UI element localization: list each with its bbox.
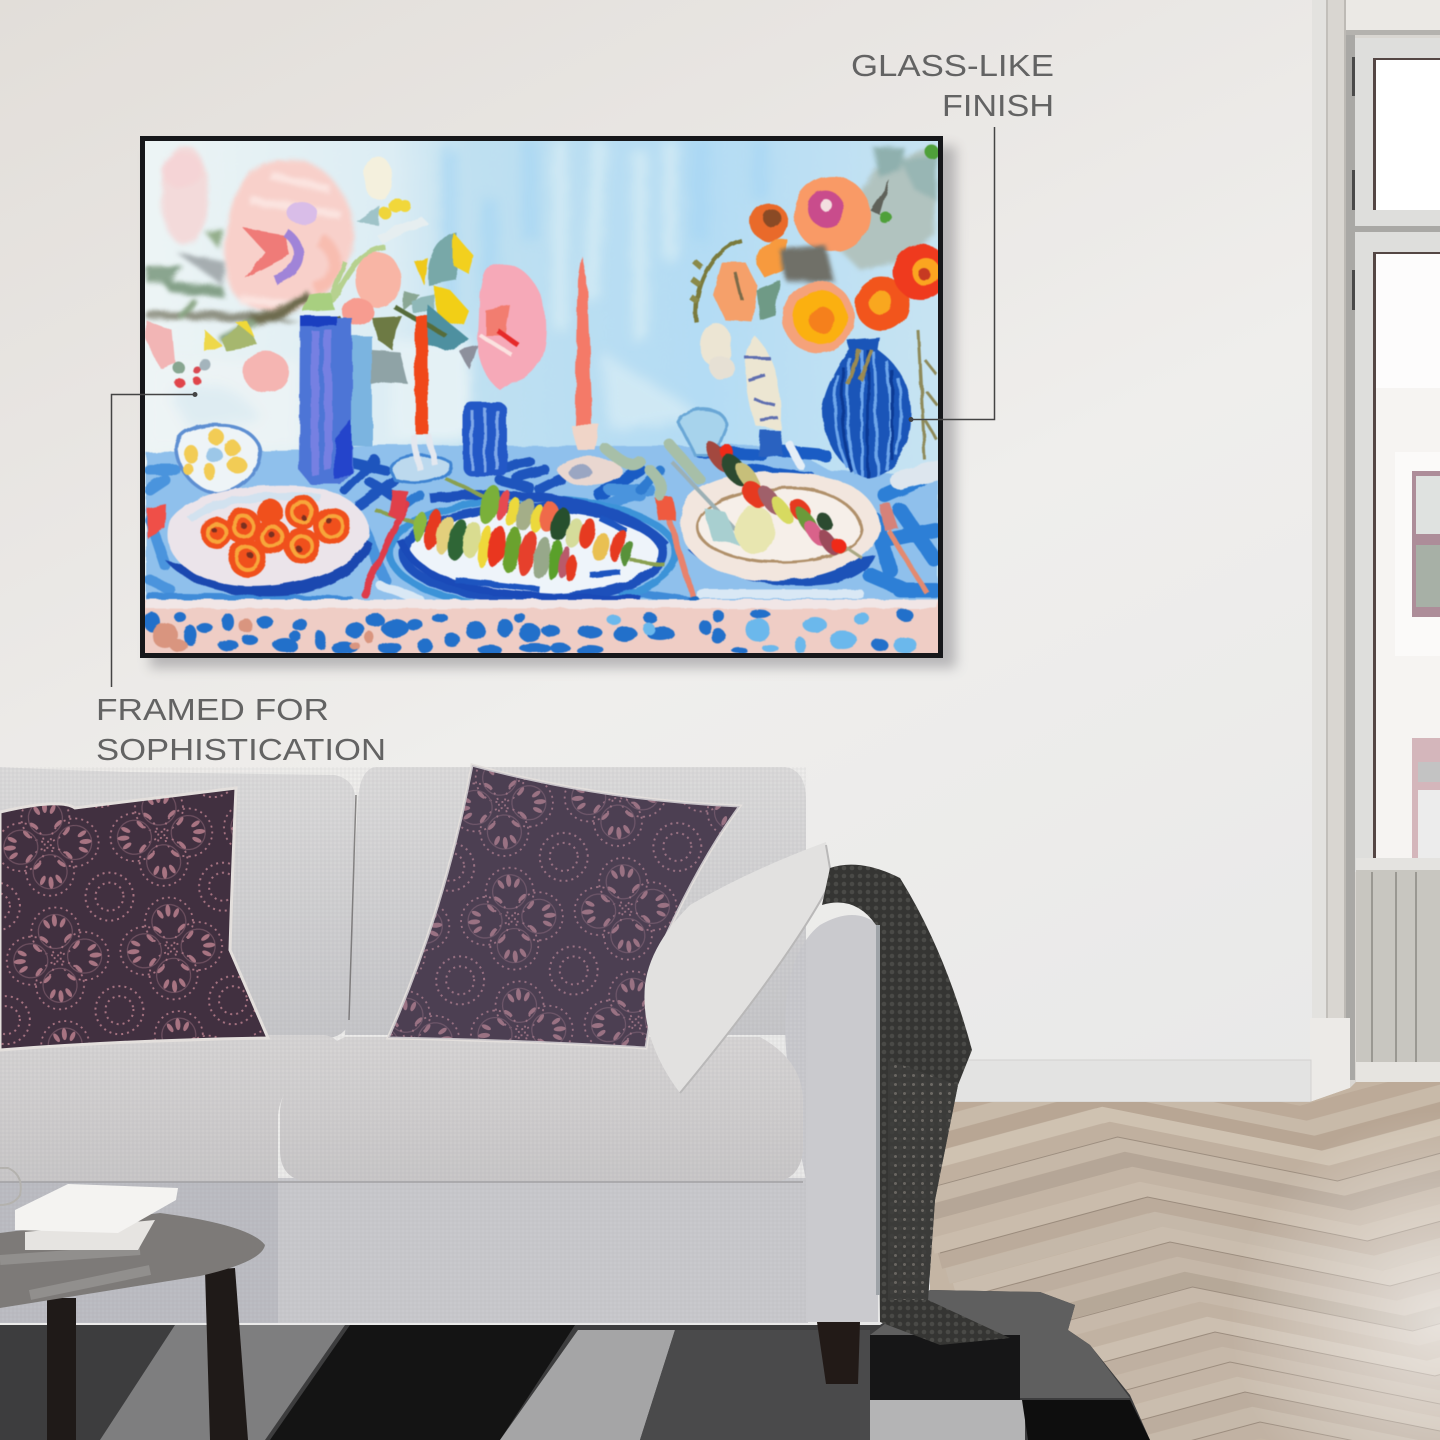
knit throw blanket — [822, 865, 1010, 1345]
left plate of tomatoes — [165, 486, 372, 597]
tablecloth base — [146, 445, 938, 610]
left red fork piece — [147, 504, 166, 538]
callout: glass-like finish: GLASS-LIKE — [851, 48, 1054, 83]
center platter — [390, 495, 676, 608]
painted sky background — [145, 141, 938, 601]
right plate — [673, 463, 880, 586]
marble highlights — [0, 1250, 150, 1295]
skewer on right plate — [701, 438, 862, 558]
blue glasses — [463, 402, 727, 476]
linen texture — [0, 767, 806, 1322]
right bouquet — [692, 145, 949, 456]
big pink poppy — [477, 264, 546, 390]
callout: glass-like finish: FINISH — [942, 88, 1054, 123]
bottom blue dabs — [144, 609, 913, 655]
white pillow — [644, 842, 832, 1093]
coral candle and holder — [557, 256, 623, 486]
top book — [15, 1184, 178, 1233]
forks right — [654, 497, 927, 609]
right back cushion — [345, 767, 806, 1035]
center fork — [364, 490, 409, 594]
center purple pillow — [388, 765, 740, 1048]
callout: glass-like finish — [851, 48, 1054, 422]
yellow-white upper flowers — [330, 156, 425, 302]
window and door frame — [1310, 0, 1440, 1102]
seat shadow — [0, 1181, 803, 1183]
teal leaves and yellow blossoms — [395, 232, 478, 370]
sofa arm — [785, 915, 878, 1322]
lower book — [25, 1220, 155, 1250]
painting frame with shadow — [140, 136, 956, 668]
cushion gap — [349, 795, 356, 1020]
ghost flower — [161, 145, 209, 245]
glass — [0, 1168, 21, 1205]
main seat cushion — [280, 1037, 803, 1182]
callout: framed for sophistication: SOPHISTICATION — [96, 732, 386, 767]
light blue dabs — [607, 613, 917, 653]
left back cushion — [0, 767, 355, 1038]
pink-brown dabs left — [152, 619, 375, 651]
callout: framed for sophistication: FRAMED FOR — [96, 692, 329, 727]
left seat cushion — [0, 1035, 338, 1182]
striped rug — [0, 1290, 1150, 1440]
callout: framed for sophistication — [96, 392, 386, 767]
blue vase — [299, 316, 372, 484]
sage leaves — [605, 445, 700, 495]
ribbed blue vase — [822, 330, 937, 478]
lower left pink blooms and berries — [146, 320, 289, 393]
left purple pillow — [0, 788, 268, 1050]
skewers on platter — [375, 478, 665, 582]
coffee table with books — [0, 1168, 265, 1440]
tablecloth strokes — [150, 445, 938, 600]
orange candle — [390, 316, 450, 483]
sofa — [0, 765, 1010, 1384]
sofa leg — [817, 1322, 860, 1384]
background brush strokes — [146, 140, 760, 450]
small bowl — [176, 425, 260, 494]
pink roses and leaves — [300, 252, 420, 385]
painting: table setting — [130, 130, 950, 660]
big pink flower — [225, 159, 353, 313]
bottom table edge — [145, 600, 938, 653]
left foliage — [146, 228, 310, 340]
sofa base — [0, 1178, 280, 1323]
table legs — [47, 1298, 76, 1440]
marble table top — [0, 1213, 265, 1308]
herringbone wood floor — [930, 1082, 1440, 1440]
baseboard — [945, 1060, 1311, 1102]
